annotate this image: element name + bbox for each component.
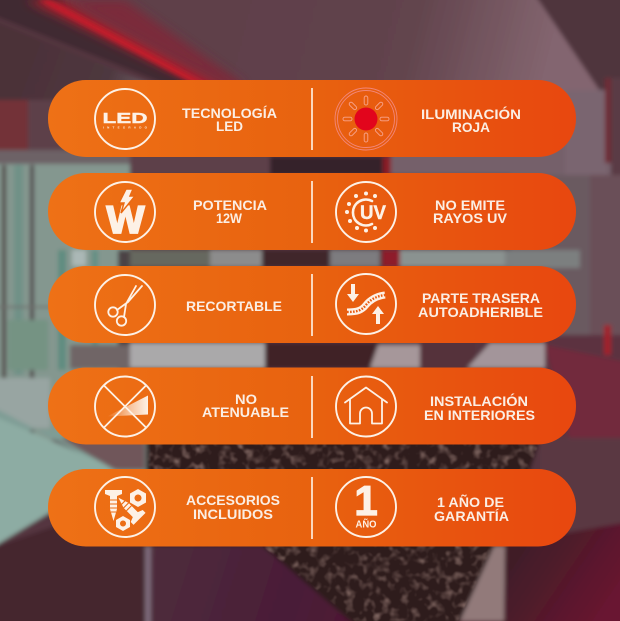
text: No atenuable [202, 391, 289, 420]
bedspread base [146, 440, 540, 621]
icon: not dimmable [95, 376, 155, 436]
curtains [0, 150, 130, 440]
icon: LED [95, 89, 155, 149]
text: Instalación en interiores: EN INTERIORES [424, 407, 535, 423]
text: 1 año de garantía: GARANTÍA [434, 508, 509, 524]
text: No atenuable: NO [235, 391, 257, 407]
text: 1 año de garantía [434, 493, 509, 524]
text: Recortable: RECORTABLE [186, 298, 282, 314]
text: No emite rayos UV: RAYOS UV [433, 210, 508, 226]
icon: scissors [95, 275, 155, 335]
icon: self-adhesive strip [336, 274, 396, 334]
text: Tecnología LED [182, 105, 277, 134]
text: Potencia 12W: POTENCIA [193, 197, 267, 213]
icon: no UV: UV [360, 203, 386, 224]
red cove light [25, 0, 245, 97]
text: Instalación en interiores [424, 392, 535, 423]
panel: row 3 [48, 266, 576, 343]
text: No emite rayos UV: NO EMITE [435, 197, 505, 213]
text: Iluminación roja: ILUMINACIÓN [421, 105, 521, 122]
floor and right [145, 546, 515, 621]
text: Tecnología LED: TECNOLOGÍA [182, 105, 277, 121]
patterned bedspread [146, 440, 540, 621]
icon: 1 year [336, 477, 396, 537]
text: No emite rayos UV [433, 197, 508, 226]
icon: LED: LED [102, 110, 148, 127]
lower left [0, 400, 150, 490]
ceiling [30, 0, 605, 110]
icon: red sun [335, 88, 397, 150]
text: Potencia 12W: 12W [216, 210, 243, 226]
text: Tecnología LED: LED [216, 118, 243, 134]
text: Parte trasera autoadherible: PARTE TRASERA [422, 290, 540, 306]
panel: row 5 [48, 469, 576, 546]
text: Accesorios incluidos: ACCESORIOS [186, 492, 280, 508]
strip behind rows 3 and 4 [130, 343, 265, 368]
text: Potencia 12W [193, 197, 267, 226]
icon: LED: INTEGRADO [103, 126, 148, 130]
panel: row 4 [48, 368, 576, 444]
text: Parte trasera autoadherible [418, 290, 543, 320]
panel: row 2 [48, 173, 576, 250]
icon: no UV [336, 182, 396, 242]
icon: 1 year: AÑO [356, 518, 376, 530]
icon: watt bolt: W [106, 199, 145, 242]
upper wall band [0, 100, 270, 175]
text: Accesorios incluidos: INCLUIDOS [193, 506, 273, 522]
icon: screws and nuts [95, 477, 155, 537]
mid strip behind rows 2 and 3 [130, 250, 210, 267]
text: Instalación en interiores: INSTALACIÓN [430, 392, 528, 409]
panel: row 1 [48, 80, 576, 157]
text: Iluminación roja [421, 105, 521, 135]
icon: 1 year: 1 [354, 477, 378, 524]
icon: house [336, 376, 396, 436]
text: Parte trasera autoadherible: AUTOADHERIBLE [418, 304, 543, 320]
icon: watt bolt [95, 182, 155, 242]
text: No atenuable: ATENUABLE [202, 404, 289, 420]
text: Iluminación roja: ROJA [452, 119, 490, 135]
text: 1 año de garantía: 1 AÑO DE [437, 493, 504, 510]
text: Accesorios incluidos [186, 492, 280, 522]
